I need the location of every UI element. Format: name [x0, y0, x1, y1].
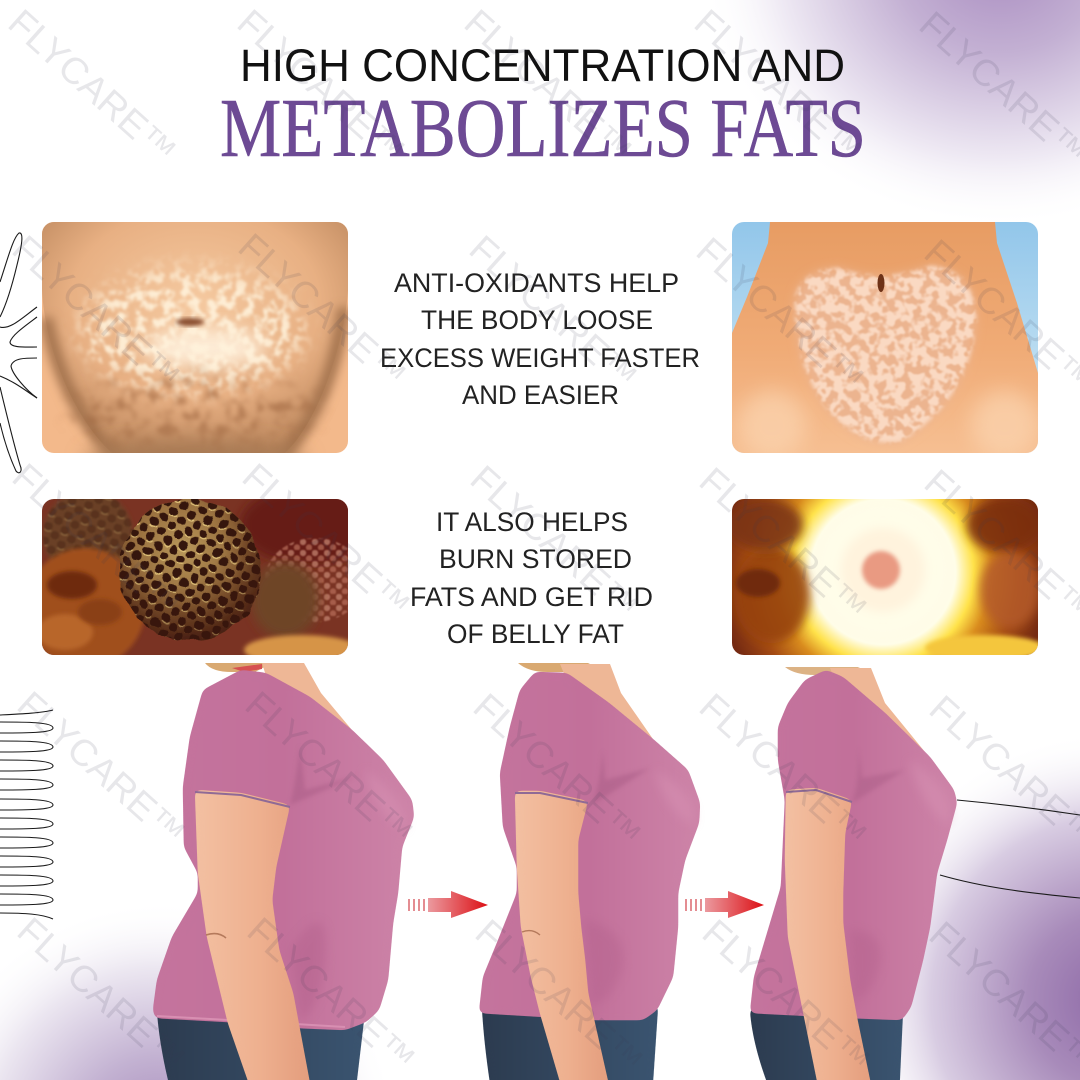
figure: before, fullest waist — [153, 663, 414, 1080]
arm — [515, 791, 611, 1080]
shirt folds — [157, 745, 406, 1027]
watermarks: FLYCARE™ — [687, 1, 870, 172]
watermarks: FLYCARE™ — [689, 229, 872, 400]
watermarks: FLYCARE™ — [462, 227, 645, 398]
watermarks: FLYCARE™ — [1, 1, 184, 172]
jeans — [750, 1008, 903, 1080]
watermarks: FLYCARE™ — [5, 227, 188, 398]
fat cell sphere — [119, 499, 261, 641]
title line two: METABOLIZES FATS — [220, 82, 866, 175]
watermarks: FLYCARE™ — [695, 911, 878, 1080]
watermarks: FLYCARE™ — [230, 1, 413, 172]
watermarks: FLYCARE™ — [466, 685, 649, 856]
text block: anti-oxidants: AND EASIER — [462, 380, 619, 410]
title — [220, 40, 866, 175]
arm — [195, 790, 312, 1080]
watermarks: FLYCARE™ — [692, 459, 875, 630]
text block: anti-oxidants — [380, 268, 700, 410]
shirt — [153, 670, 414, 1030]
text block: anti-oxidants: EXCESS WEIGHT FASTER — [380, 343, 700, 373]
watermarks: FLYCARE™ — [5, 455, 188, 626]
watermarks: FLYCARE™ — [231, 225, 414, 396]
hair and neck — [205, 663, 362, 742]
text block: anti-oxidants: ANTI-OXIDANTS HELP — [394, 268, 679, 298]
photo: cellulite belly illustration — [732, 222, 1039, 459]
photo: burning fat cell — [727, 497, 1045, 661]
decorative lines right — [940, 800, 1080, 898]
text block: burn stored fats: IT ALSO HELPS — [436, 507, 628, 537]
figure: middle — [479, 663, 700, 1080]
jeans — [482, 1005, 658, 1080]
decorative zigzag comb — [0, 710, 53, 919]
arrow: progress one — [408, 891, 488, 918]
jeans — [157, 1010, 365, 1080]
watermarks: FLYCARE™ — [468, 911, 651, 1080]
title line one: HIGH CONCENTRATION AND — [240, 40, 845, 91]
text block: burn stored fats: BURN STORED — [439, 544, 632, 574]
figure: after, slim waist — [750, 667, 957, 1080]
decorative starburst outline — [0, 233, 37, 473]
text block: burn stored fats — [410, 507, 653, 649]
watermarks: FLYCARE™ — [10, 909, 193, 1080]
watermarks: FLYCARE™ — [235, 455, 418, 626]
watermarks: FLYCARE™ — [238, 683, 421, 854]
watermarks: FLYCARE™ — [240, 909, 423, 1080]
text block: burn stored fats: FATS AND GET RID — [410, 582, 653, 612]
arm — [785, 788, 873, 1080]
shirt folds — [850, 745, 950, 1000]
text block: burn stored fats: OF BELLY FAT — [447, 619, 624, 649]
photo: cellulite belly front — [42, 222, 348, 453]
hair and neck — [518, 663, 655, 742]
watermarks: FLYCARE™ — [692, 685, 875, 856]
watermarks: FLYCARE™ — [457, 1, 640, 172]
shirt — [479, 672, 700, 1020]
text block: anti-oxidants: THE BODY LOOSE — [421, 305, 653, 335]
shirt folds — [585, 750, 694, 1005]
watermarks: FLYCARE™ — [10, 683, 193, 854]
hair and neck — [785, 667, 925, 752]
shirt — [750, 670, 957, 1020]
watermarks: FLYCARE™ — [463, 457, 646, 628]
arrow: progress two — [685, 891, 764, 918]
photo: fat cell — [42, 499, 348, 655]
